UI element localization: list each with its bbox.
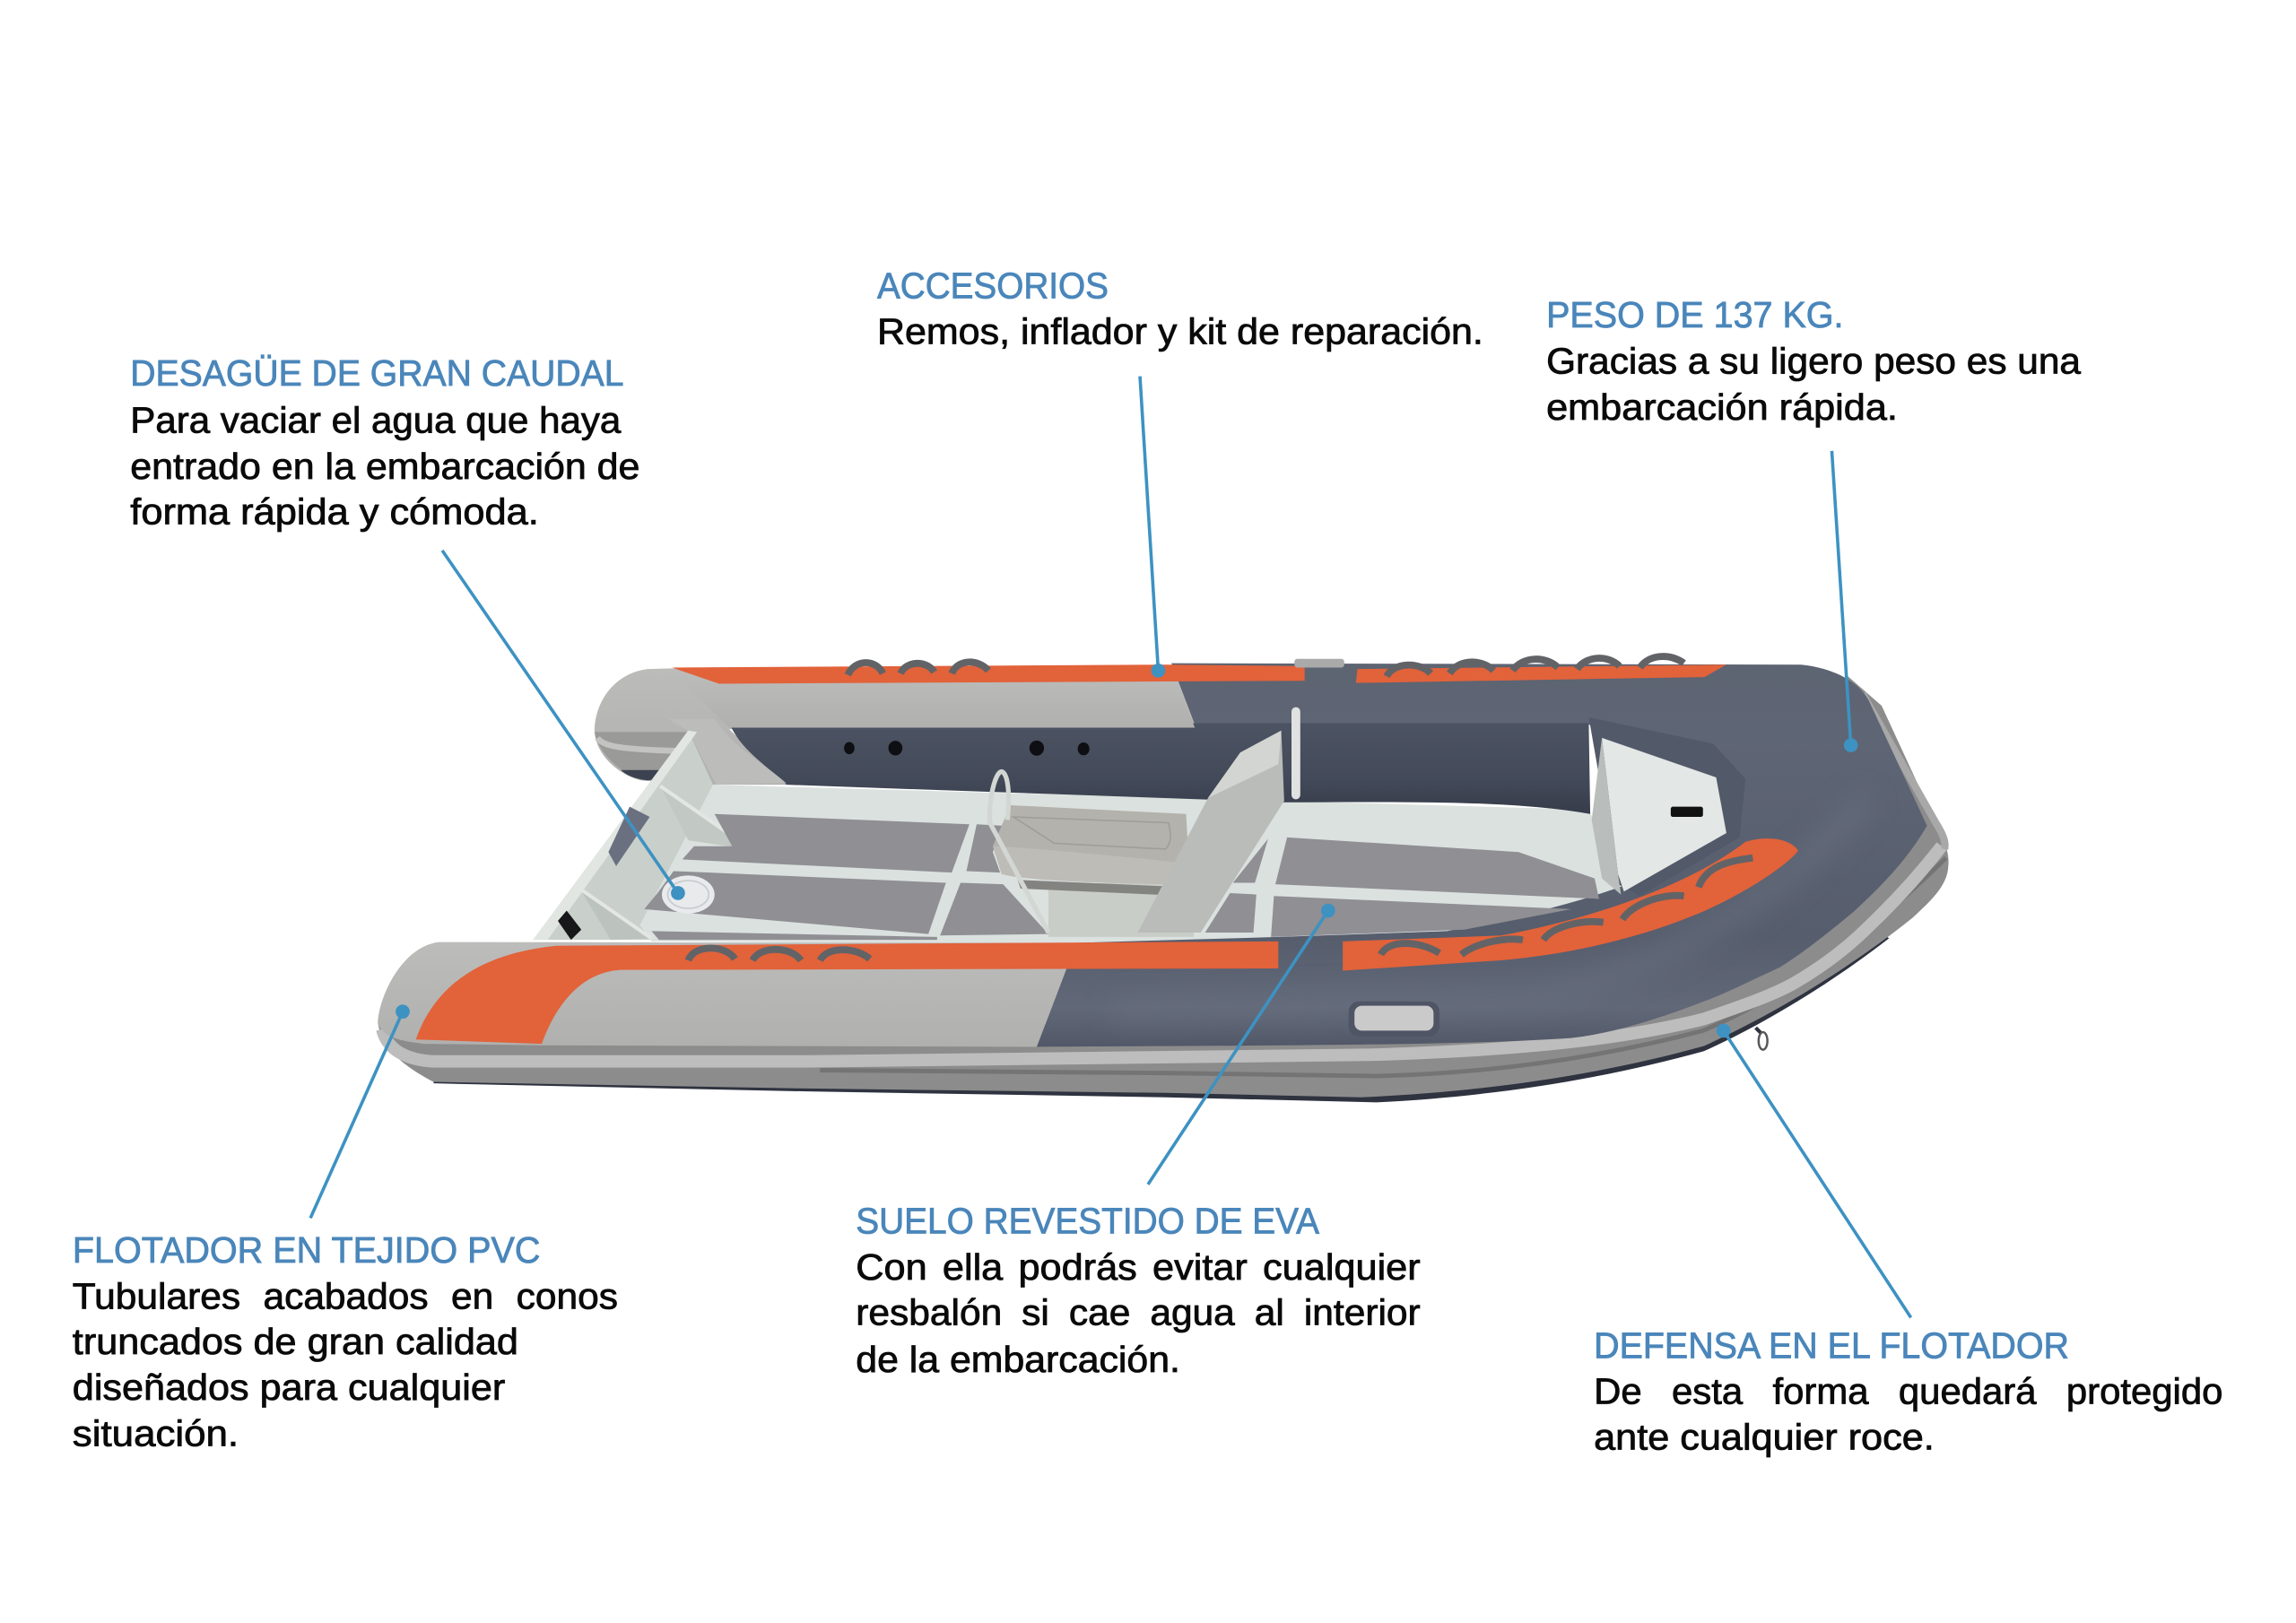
description: Tubulares acabados en conos: [73, 1276, 618, 1317]
description: Para vaciar el agua que haya: [130, 399, 622, 440]
description: [73, 1276, 618, 1454]
far gray section edge: [652, 671, 1195, 727]
leader line: [442, 551, 678, 893]
far gray end cap: [667, 719, 787, 785]
leader line: [1140, 377, 1158, 671]
marker: [1152, 664, 1165, 678]
description: ante cualquier roce.: [1594, 1416, 1935, 1457]
fender rub strip: [382, 846, 1942, 1062]
grab handle: [1349, 1002, 1439, 1037]
callout: peso: [1546, 294, 2081, 752]
marker: [1321, 904, 1335, 917]
console pillar: [1138, 711, 1296, 933]
description: [1546, 340, 2081, 428]
heading: FLOTADOR EN TEJIDO PVC: [73, 1229, 540, 1271]
description: Con ella podrás evitar cualquier: [856, 1246, 1421, 1288]
marker: [1844, 738, 1858, 752]
description: forma rápida y cómoda.: [130, 491, 539, 533]
seat rails: [989, 771, 1048, 933]
description: [1594, 1371, 2222, 1457]
callout: accesorios: [877, 265, 1483, 678]
leader line: [1148, 911, 1328, 1185]
handles: [688, 656, 1752, 960]
dark hull strip: [433, 925, 1889, 1102]
description: embarcación rápida.: [1546, 386, 1898, 428]
description: [856, 1246, 1421, 1380]
description: Gracias a su ligero peso es una: [1546, 340, 2081, 381]
description: de la embarcación.: [856, 1339, 1180, 1380]
description: diseñados para cualquier: [73, 1367, 505, 1408]
tube highlight: [1113, 798, 1867, 1011]
drain plug: [662, 875, 715, 914]
bow side strip: [1863, 694, 1945, 849]
heading: DEFENSA EN EL FLOTADOR: [1594, 1324, 2069, 1366]
callout: desagüe: [130, 352, 685, 900]
far inner tube: [729, 724, 1590, 814]
heading: PESO DE 137 KG.: [1546, 294, 1844, 335]
callout: defensa: [1594, 1024, 2222, 1457]
heading: SUELO REVESTIDO DE EVA: [856, 1201, 1320, 1242]
leader line: [1831, 451, 1851, 745]
description: De esta forma quedará protegido: [1594, 1371, 2222, 1412]
callout: flotador: [73, 1004, 618, 1454]
tube holes: [844, 741, 1090, 756]
heading: ACCESORIOS: [877, 265, 1109, 306]
marker: [1717, 1024, 1730, 1037]
bow locker: [1588, 717, 1745, 896]
description: [130, 399, 639, 533]
boat illustration: [378, 656, 1949, 1102]
description: resbalón si cae agua al interior: [856, 1292, 1421, 1333]
description: entrado en la embarcación de: [130, 446, 639, 487]
callout: suelo: [856, 904, 1421, 1380]
seat: [993, 805, 1201, 937]
floor mats: [644, 814, 1599, 940]
leader line: [1724, 1030, 1911, 1317]
description: Remos, inflador y kit de reparación.: [877, 311, 1483, 352]
fender body: [378, 676, 1949, 1098]
heading: DESAGÜE DE GRAN CAUDAL: [130, 352, 624, 394]
leader line: [310, 1011, 403, 1218]
far bow orange stripe: [1356, 664, 1726, 683]
top cleat: [1294, 659, 1344, 668]
navy bow tube: [1037, 664, 1927, 1046]
transom: [533, 731, 736, 940]
marker: [671, 886, 685, 900]
marker: [396, 1004, 410, 1019]
far tube stern: [595, 664, 1201, 785]
description: situación.: [73, 1412, 239, 1454]
fender groove: [820, 858, 1946, 1076]
floor: [639, 785, 1627, 944]
near gray tube: [378, 942, 1076, 1046]
near bow orange stripe: [1343, 838, 1798, 970]
near orange stripe: [416, 942, 1278, 1044]
description: truncados de gran calidad: [73, 1321, 518, 1362]
far orange stripe: [672, 664, 1305, 683]
tow ring: [1756, 1028, 1768, 1050]
